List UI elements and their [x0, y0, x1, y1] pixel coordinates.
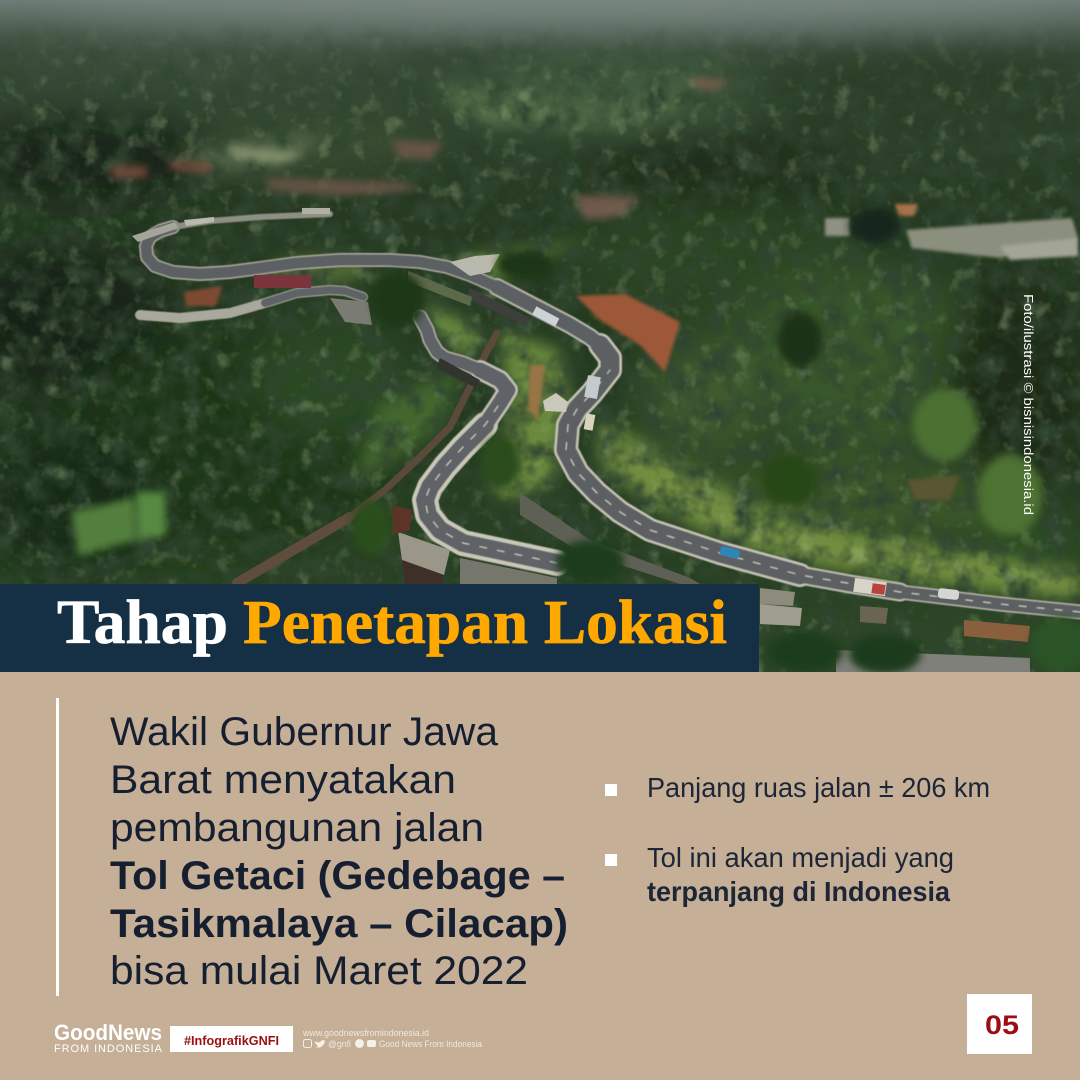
logo: GoodNews From Indonesia	[54, 1020, 163, 1055]
main statement text: Barat menyatakan	[110, 758, 456, 802]
page number box: 05	[985, 1010, 1019, 1040]
logo: GoodNews From Indonesia: GoodNews	[54, 1020, 162, 1045]
rice field	[72, 492, 166, 556]
main statement text: bisa mulai Maret 2022	[110, 949, 528, 993]
bullet text 1: Panjang ruas jalan ± 206 km	[647, 772, 990, 803]
panel: lower tan area	[0, 672, 1080, 1080]
page number box	[967, 994, 1032, 1054]
aerial photo of winding road	[0, 0, 1080, 674]
road: main curve	[146, 214, 1080, 612]
main statement text	[110, 710, 568, 993]
main statement text: Tasikmalaya – Cilacap)	[110, 902, 568, 946]
vertical divider line	[56, 698, 59, 996]
factory roofs on the right	[825, 204, 1078, 260]
bullet text 2	[647, 842, 954, 907]
railway track	[237, 333, 497, 583]
bullet marker 1	[605, 784, 617, 796]
village roofs in the distance	[110, 78, 730, 220]
icon: youtube	[367, 1040, 376, 1047]
foreground trees	[352, 208, 1080, 674]
bullet marker 2	[605, 854, 617, 866]
footer website and social handles: @gnfi	[328, 1039, 351, 1049]
footer website and social handles: www.goodnewsfromindonesia.id	[302, 1028, 429, 1038]
main statement text: Tol Getaci (Gedebage –	[110, 854, 565, 898]
red soil patches	[184, 286, 960, 500]
logo: GoodNews From Indonesia: FROM INDONESIA	[54, 1043, 163, 1055]
main statement text: pembangunan jalan	[110, 806, 484, 850]
bullet text 2: terpanjang di Indonesia	[647, 876, 951, 907]
retaining walls, buildings and vehicles	[132, 208, 1030, 672]
main statement text: Wakil Gubernur Jawa	[110, 710, 499, 754]
bullet text 2: Tol ini akan menjadi yang	[647, 842, 954, 873]
title: Tahap	[57, 589, 228, 657]
icon: instagram	[304, 1040, 312, 1048]
bullet list	[605, 772, 990, 907]
hashtag badge: #InfografikGNFI	[184, 1033, 279, 1048]
icon: twitter	[315, 1040, 325, 1048]
photo credit: Foto/ilustrasi © bisnisindonesia.id	[1021, 294, 1035, 515]
footer website and social handles	[302, 1028, 482, 1049]
road: lower switchback	[140, 290, 557, 563]
icon: facebook	[355, 1039, 364, 1048]
title: Penetapan Lokasi	[243, 589, 727, 657]
speckled tree canopy texture	[0, 0, 1080, 672]
footer website and social handles: Good News From Indonesia	[379, 1039, 482, 1049]
hashtag badge	[170, 1026, 293, 1052]
title banner	[0, 584, 759, 672]
